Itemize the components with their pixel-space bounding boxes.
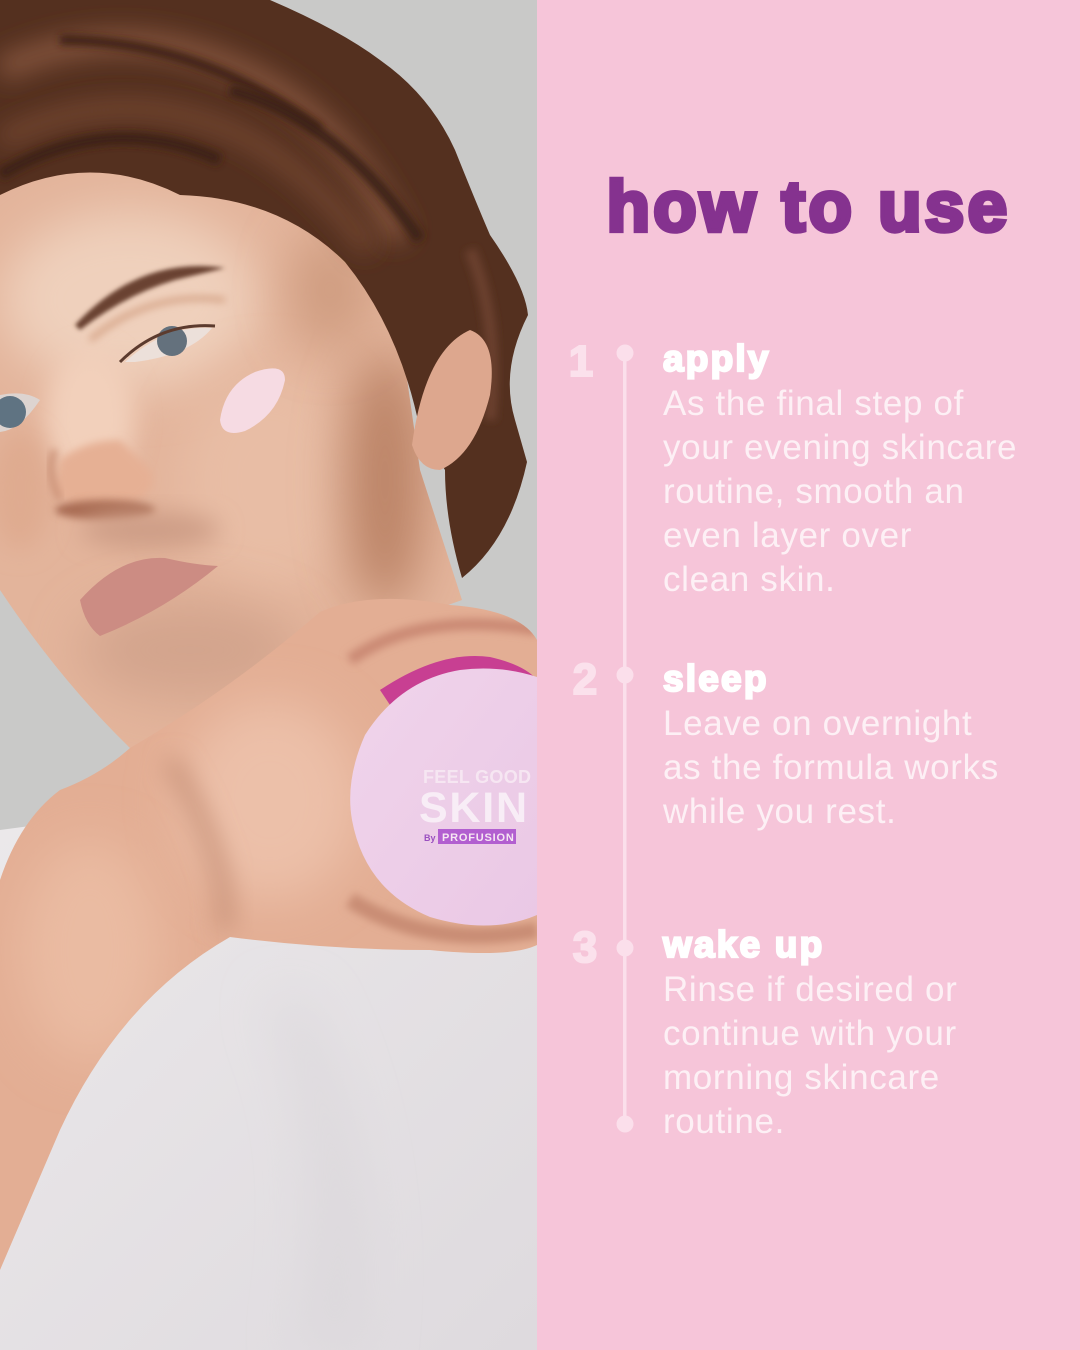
jar: PROFUSION xyxy=(442,832,515,844)
jar: By xyxy=(424,833,436,843)
panel: right pink background xyxy=(537,0,1080,1350)
eyebrow xyxy=(75,266,225,330)
ear xyxy=(412,330,492,470)
left eye xyxy=(0,393,40,432)
step 3 text: wake up xyxy=(663,924,824,965)
step 2 text: sleep xyxy=(663,658,769,699)
step 3 text: morning skincare xyxy=(663,1058,940,1097)
shirt xyxy=(0,826,537,1350)
hair xyxy=(0,0,528,578)
lips xyxy=(80,558,218,636)
step 1 text xyxy=(663,338,1017,599)
hand and arm xyxy=(0,580,537,1280)
step number 1: 1 xyxy=(569,337,593,386)
step 2 text xyxy=(663,658,999,831)
step 1 text: clean skin. xyxy=(663,560,836,599)
cream swatch xyxy=(220,368,285,433)
photo: man with cream on cheek holding jar xyxy=(0,0,537,1350)
step 2 text: Leave on overnight xyxy=(663,704,972,743)
step 3 text: routine. xyxy=(663,1102,785,1141)
step 1 text: even layer over xyxy=(663,516,912,555)
step number 3: 3 xyxy=(573,923,597,972)
step 1 text: apply xyxy=(663,338,771,379)
jar: SKIN xyxy=(419,784,527,832)
right eye xyxy=(90,298,225,362)
face xyxy=(0,172,462,748)
jar label: FEEL GOOD xyxy=(423,767,531,787)
step 3 text: continue with your xyxy=(663,1014,957,1053)
jar xyxy=(350,656,537,926)
title: how to use xyxy=(607,168,1010,247)
step 3 text: Rinse if desired or xyxy=(663,970,957,1009)
step 2 text: as the formula works xyxy=(663,748,999,787)
step 3 text xyxy=(662,924,957,1141)
step number 2: 2 xyxy=(573,655,597,704)
step 1 text: routine, smooth an xyxy=(663,472,965,511)
background xyxy=(0,0,537,1350)
step 1 text: As the final step of xyxy=(663,384,964,423)
step 2 text: while you rest. xyxy=(663,792,896,831)
step 1 text: your evening skincare xyxy=(663,428,1017,467)
